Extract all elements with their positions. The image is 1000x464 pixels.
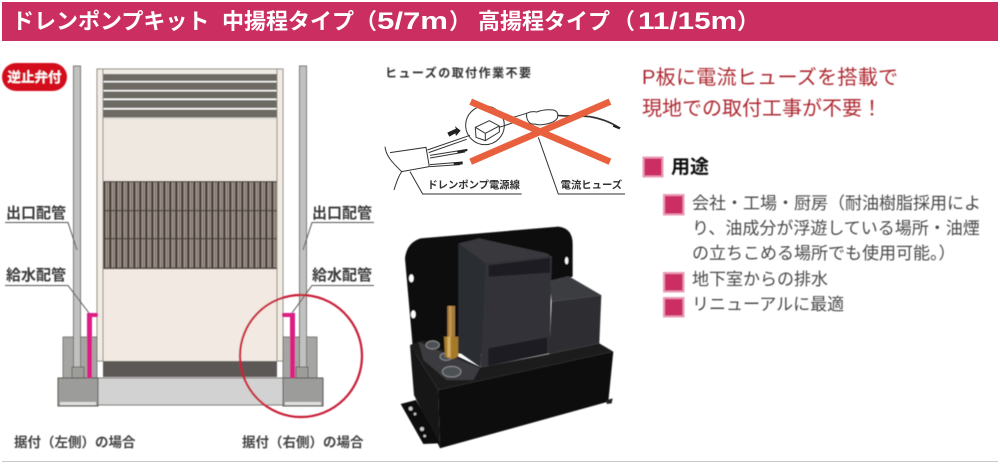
label: left supply pipe: 給水配管 xyxy=(6,266,66,284)
side housing xyxy=(549,276,602,354)
check valve badge: 逆止弁付 xyxy=(8,69,62,85)
unit base xyxy=(98,378,283,405)
label: current fuse: 電流ヒューズ xyxy=(561,179,623,192)
mounting flanges xyxy=(401,400,440,444)
header banner: ） xyxy=(449,9,471,34)
connector inset xyxy=(466,106,513,145)
header banner: 11/15m xyxy=(638,8,737,35)
brass fitting xyxy=(444,306,458,359)
fuse body xyxy=(510,110,618,127)
label: right supply pipe xyxy=(292,266,374,313)
feature headline xyxy=(642,66,898,120)
usage section xyxy=(644,156,981,316)
header banner: ） xyxy=(737,9,759,34)
usage item: offices and kitchens xyxy=(664,194,981,263)
label: pump power line: ドレンポンプ電源線 xyxy=(427,179,521,192)
header banner: ドレンポンプキット xyxy=(12,9,209,34)
feature headline: 現地での取付工事が不要！ xyxy=(642,97,882,120)
lower tank xyxy=(410,340,613,448)
check valve badge xyxy=(2,63,67,91)
left piping and foot xyxy=(58,66,98,406)
indoor unit xyxy=(97,69,283,377)
caption: left installation: 据付（左側）の場合 xyxy=(14,434,136,450)
usage item: offices and kitchens: り、油成分が浮遊している場所・油煙 xyxy=(692,219,980,238)
usage item: offices and kitchens: 会社・工場・厨房（耐油樹脂採用によ xyxy=(692,194,981,213)
usage item: offices and kitchens: の立ちこめる場所でも使用可能。） xyxy=(692,243,956,263)
usage item: basement drainage: 地下室からの排水 xyxy=(692,270,828,289)
feature headline: P板に電流ヒューズを搭載で xyxy=(642,66,898,89)
label: left outlet pipe xyxy=(5,204,77,250)
lower grille xyxy=(103,181,277,269)
main housing xyxy=(458,238,552,367)
label: left outlet pipe: 出口配管 xyxy=(6,204,66,222)
label: right supply pipe: 給水配管 xyxy=(312,266,372,284)
power cable xyxy=(385,135,625,194)
header banner: 中揚程タイプ xyxy=(222,9,354,34)
header banner: 高揚程タイプ xyxy=(478,9,610,34)
product photo: drain pump xyxy=(401,227,613,448)
usage heading xyxy=(644,156,709,178)
wire tips xyxy=(453,149,467,165)
label: right outlet pipe: 出口配管 xyxy=(312,204,372,222)
right piping and foot xyxy=(282,66,323,406)
label: left supply pipe xyxy=(5,266,89,313)
header banner: （ xyxy=(613,9,635,34)
installation diagram xyxy=(2,63,374,450)
highlight circle xyxy=(240,295,362,417)
gauges xyxy=(426,341,461,377)
fuse wiring drawing xyxy=(385,102,625,194)
top louver xyxy=(103,74,277,120)
header banner: 5/7m xyxy=(377,8,448,35)
header banner: （ xyxy=(355,9,377,34)
header banner xyxy=(2,2,998,41)
back plate xyxy=(405,227,573,353)
caption: right installation: 据付（右側）の場合 xyxy=(242,434,364,450)
usage item: renewal: リニューアルに最適 xyxy=(692,295,844,314)
label: right outlet pipe xyxy=(303,204,374,250)
fuse heading: ヒューズの取付作業不要 xyxy=(385,65,531,80)
usage heading: 用途 xyxy=(671,156,709,178)
cross-out mark xyxy=(471,102,610,162)
